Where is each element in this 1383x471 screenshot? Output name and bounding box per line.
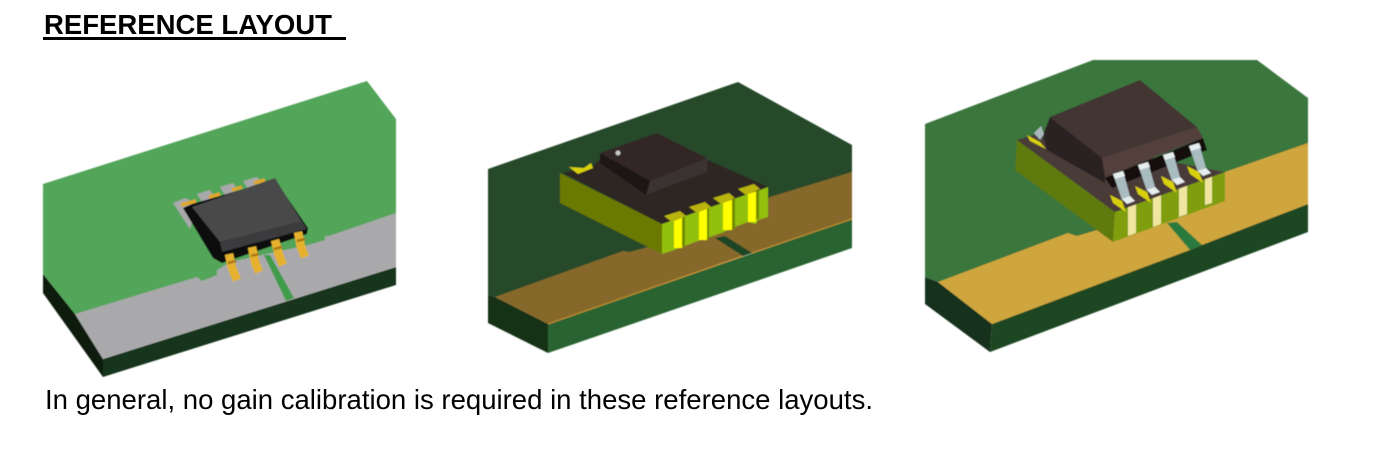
green slot between pads [264, 255, 294, 301]
socket front face lime [662, 187, 768, 254]
board front side [548, 219, 852, 353]
gold pads [938, 143, 1308, 324]
raised block right face [646, 158, 707, 195]
silver leads [1113, 143, 1211, 204]
title: REFERENCE LAYOUT [44, 9, 332, 40]
chip top face [192, 178, 302, 242]
chip chamfer band [1102, 127, 1203, 176]
board top surface dark green [488, 82, 852, 324]
chip left face [1043, 117, 1105, 183]
board top surface green [43, 81, 396, 359]
panel: grey pad PCB layout [43, 81, 396, 377]
socket left face olive [1015, 140, 1115, 242]
chip chamfer band [220, 221, 307, 252]
copper pads [495, 172, 852, 324]
board top surface green [925, 60, 1308, 324]
board left side [43, 274, 103, 377]
pin one dot [616, 150, 620, 156]
cream contacts [1128, 175, 1212, 236]
panel: gold pad PCB layout [925, 60, 1308, 352]
copper edge highlight [548, 256, 743, 324]
panel: socket on copper PCB layout [488, 82, 852, 353]
grey copper pads [75, 213, 396, 359]
back silver lead [1034, 126, 1044, 140]
yellow lands [1027, 135, 1203, 212]
back gold leads [181, 180, 265, 205]
caption text: In general, no gain calibration is required in these reference layouts. [45, 384, 873, 415]
raised block top face [600, 133, 707, 181]
socket top plate [1017, 135, 1225, 212]
socket top plate [563, 159, 768, 224]
board left side [925, 277, 992, 352]
contact shadows [682, 188, 759, 246]
back yellow pad [569, 163, 593, 174]
chip body underside [183, 180, 308, 263]
chip underside shadow [1105, 138, 1207, 188]
socket left face olive [560, 173, 662, 254]
board front side [990, 204, 1308, 352]
front gold leads [228, 232, 305, 280]
raised block left face [600, 153, 650, 195]
board left side [488, 295, 548, 353]
back grey pads [173, 177, 264, 229]
slot between pads [715, 236, 752, 256]
yellow contact tops [664, 184, 760, 222]
socket yellow contacts [674, 189, 756, 248]
chip top face [1050, 80, 1197, 158]
board front side [103, 267, 396, 377]
slot between pads [1167, 222, 1202, 250]
socket front face lime [1113, 172, 1225, 242]
